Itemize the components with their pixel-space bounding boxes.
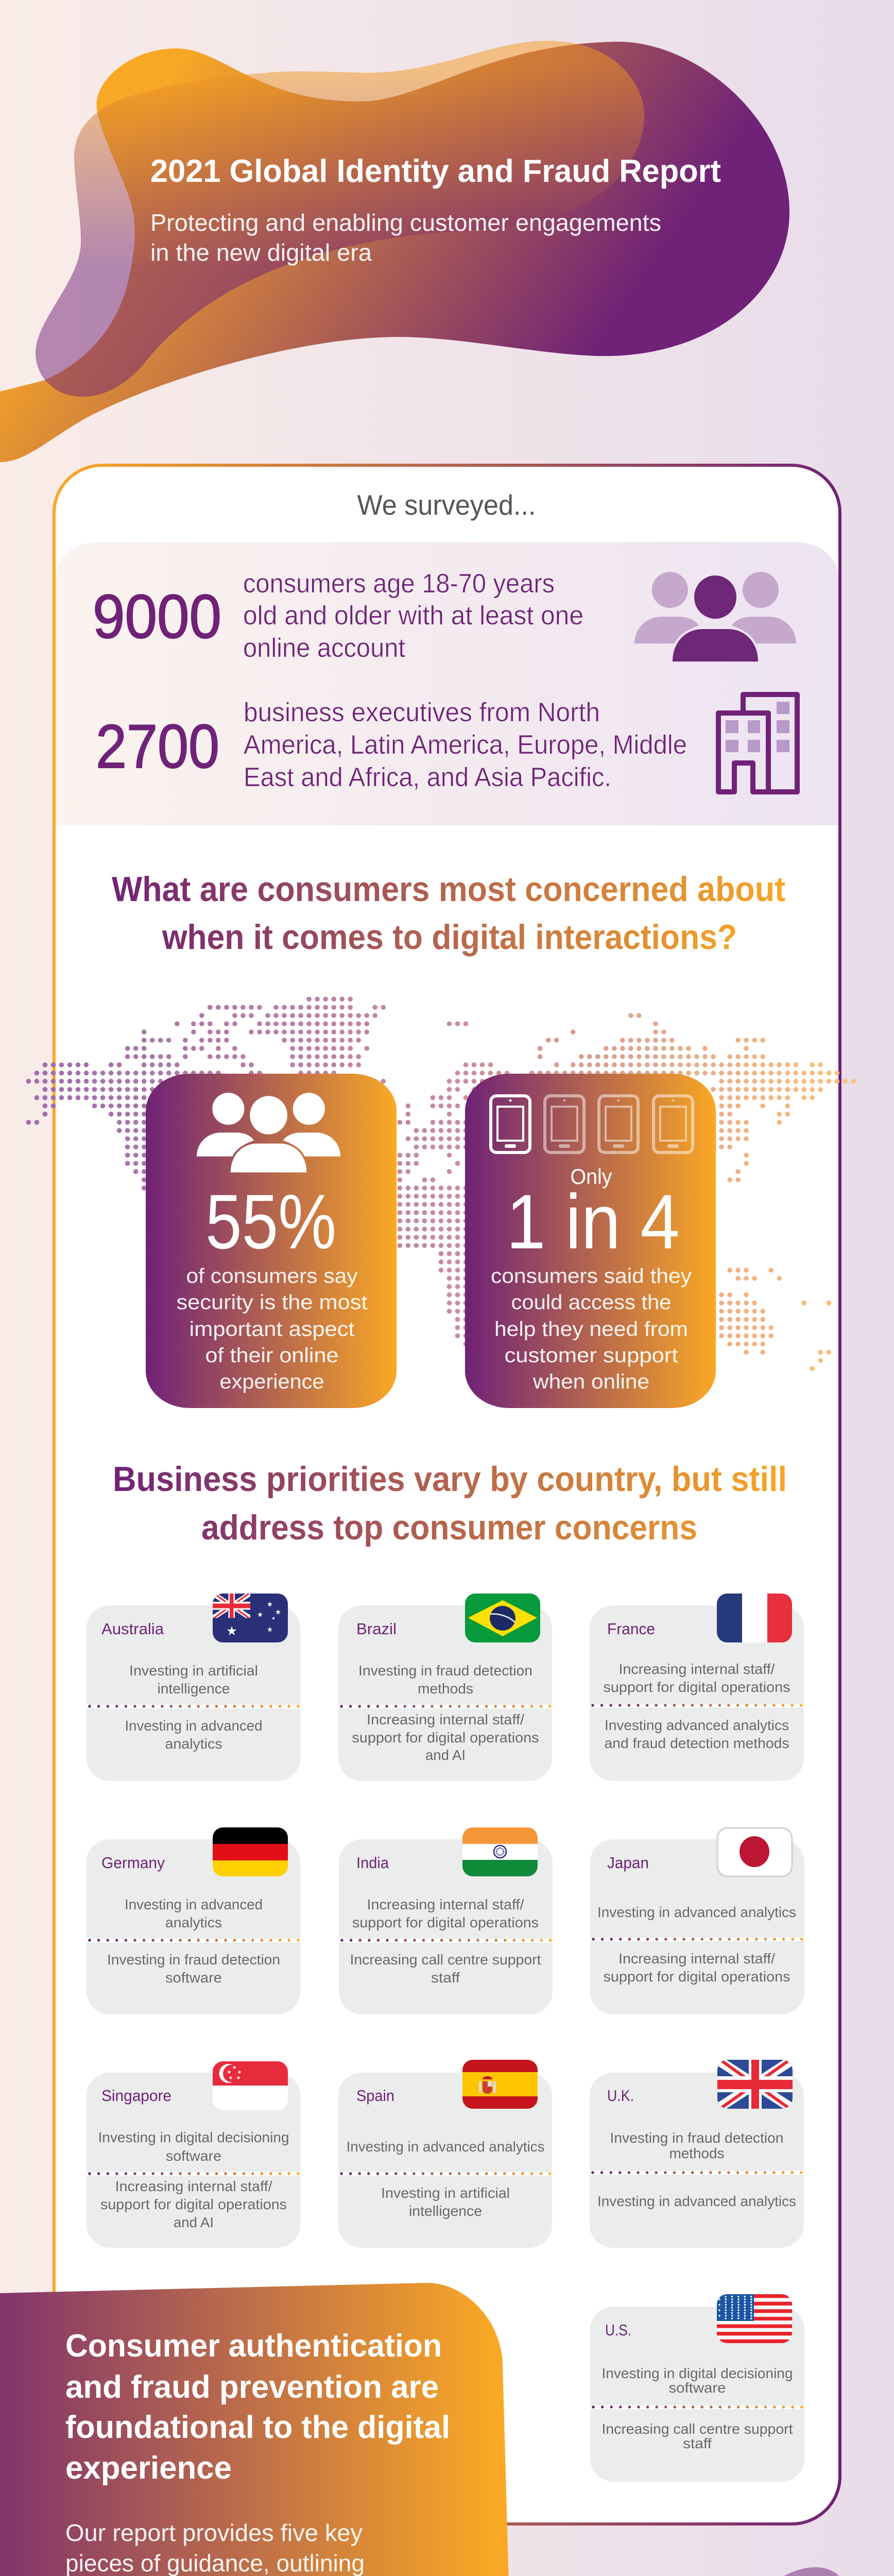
description: when online — [532, 1370, 649, 1393]
icon: office buildings — [718, 694, 797, 792]
heading: consumer concerns — [112, 870, 785, 957]
priorities: Investing in advanced analytics — [597, 1904, 796, 1920]
priorities — [125, 1663, 263, 1752]
priorities — [346, 2139, 545, 2219]
flag: Singapore — [213, 2061, 288, 2111]
stat: 2700 executives: 2700 — [96, 712, 219, 781]
stat: 9000 consumers: consumers age 18-70 years — [243, 569, 555, 599]
country name: Germany — [101, 1854, 165, 1872]
panel: survey band — [56, 542, 838, 825]
country name: Australia — [101, 1620, 164, 1638]
heading: authentication — [65, 2328, 450, 2486]
panel: India — [339, 1827, 553, 2014]
priorities: software — [166, 2148, 221, 2164]
stat: 2700 executives: East and Africa, and Asia Pacific. — [244, 762, 611, 792]
heading: authentication: and fraud prevention are — [65, 2369, 439, 2405]
priorities: Investing in advanced analytics — [346, 2139, 545, 2155]
flag: France — [717, 1594, 793, 1643]
flag: U.K. — [717, 2059, 793, 2109]
priorities: and AI — [425, 1747, 466, 1763]
panel: U.K. — [590, 2059, 804, 2248]
priorities: intelligence — [158, 1681, 230, 1697]
priorities: Increasing internal staff/ — [115, 2178, 272, 2194]
priorities: Investing in fraud detection — [610, 2130, 784, 2146]
stat: 2700 executives — [96, 698, 687, 792]
heading: business priorities — [113, 1460, 787, 1547]
priorities: software — [165, 1970, 222, 1986]
priorities: Investing in advanced — [125, 1896, 263, 1912]
flag: India — [462, 1827, 538, 1877]
hero subtitle: in the new digital era — [150, 239, 372, 266]
priorities: Investing in artificial — [129, 1663, 258, 1679]
country name: U.K. — [607, 2087, 634, 2105]
description: of their online — [205, 1344, 339, 1367]
hero subtitle: Protecting and enabling customer engagements — [150, 209, 661, 236]
panel: Germany — [87, 1827, 300, 2014]
heading: authentication: experience — [65, 2450, 232, 2486]
description: of consumers say — [186, 1265, 357, 1287]
stat: 9000 consumers: online account — [243, 633, 406, 663]
country name: France — [607, 1620, 655, 1638]
priorities: analytics — [165, 1914, 222, 1930]
priorities — [601, 2365, 793, 2451]
heading: business priorities: Business priorities vary by country, but still — [113, 1460, 787, 1499]
panel: Brazil — [338, 1594, 552, 1781]
priorities: Investing in advanced — [125, 1718, 263, 1734]
description: customer support — [505, 1344, 678, 1367]
priorities: Increasing call centre support — [601, 2421, 793, 2437]
body text — [65, 2519, 433, 2576]
priorities — [98, 2129, 289, 2230]
priorities: Increasing internal staff/ — [367, 1896, 524, 1912]
bottom blob graphic — [269, 2567, 868, 2576]
stat: 9000 consumers — [93, 569, 583, 663]
heading: consumer concerns: when it comes to digital interactions? — [162, 918, 737, 957]
priorities: analytics — [165, 1736, 222, 1752]
priorities: Investing in fraud detection — [358, 1663, 532, 1679]
stat: 9000 consumers: old and older with at least one — [243, 601, 583, 631]
description — [491, 1265, 692, 1393]
country name: Brazil — [356, 1620, 397, 1638]
priorities: staff — [683, 2435, 712, 2451]
priorities: Investing advanced analytics — [605, 1717, 789, 1733]
priorities — [597, 1904, 796, 1985]
icon: four phones — [491, 1096, 693, 1153]
panel: 1 in 4 consumers — [465, 1074, 716, 1408]
flag: U.S. — [717, 2294, 792, 2344]
flag: Germany — [213, 1827, 288, 1877]
priorities — [352, 1663, 539, 1763]
priorities: Increasing internal staff/ — [367, 1711, 524, 1727]
description: important aspect — [190, 1318, 354, 1341]
panel: call to action gradient — [0, 2283, 509, 2576]
priorities: Increasing internal staff/ — [618, 1951, 775, 1967]
hero blob graphic — [0, 41, 789, 462]
flag: Australia — [213, 1593, 288, 1643]
panel: Australia — [87, 1593, 300, 1781]
priorities: Investing in fraud detection — [107, 1952, 280, 1968]
priorities: Investing in digital decisioning — [98, 2129, 289, 2145]
icon: people — [634, 572, 796, 662]
priorities: support for digital operations — [604, 1679, 790, 1695]
priorities: staff — [431, 1970, 460, 1986]
main white card outline — [54, 465, 840, 2524]
panel: U.S. — [590, 2294, 804, 2482]
stat: 55%: 55% — [205, 1178, 336, 1265]
dotted world map — [28, 999, 854, 1369]
country name: India — [356, 1854, 389, 1872]
priorities: Increasing call centre support — [350, 1952, 541, 1968]
panel: France — [590, 1594, 804, 1781]
hero title: 2021 Global Identity and Fraud Report — [150, 154, 721, 189]
stat: 2700 executives: business executives from North — [244, 698, 600, 727]
description: security is the most — [176, 1291, 368, 1314]
priorities: support for digital operations — [100, 2196, 287, 2212]
priorities — [107, 1896, 280, 1986]
priorities: support for digital operations — [352, 1914, 539, 1930]
description: help they need from — [494, 1318, 688, 1341]
panel: Japan — [590, 1828, 804, 2014]
priorities: support for digital operations — [604, 1969, 790, 1985]
priorities: methods — [669, 2145, 724, 2161]
priorities: Investing in digital decisioning — [601, 2365, 793, 2381]
priorities: Investing in artificial — [381, 2185, 510, 2201]
icon: people white — [197, 1093, 340, 1173]
hero subtitle — [150, 209, 661, 266]
heading: we surveyed: We surveyed... — [357, 489, 536, 521]
country name: U.S. — [605, 2321, 631, 2339]
panel: Spain — [338, 2060, 552, 2248]
country name: Japan — [607, 1854, 649, 1872]
heading: business priorities: address top consumer concerns — [201, 1508, 697, 1547]
description: experience — [219, 1370, 324, 1393]
heading: consumer concerns: What are consumers most concerned about — [112, 870, 785, 909]
country name: Singapore — [101, 2087, 171, 2105]
priorities — [604, 1661, 790, 1751]
body text: pieces of guidance, outlining — [65, 2550, 365, 2576]
priorities: Increasing internal staff/ — [619, 1661, 775, 1677]
flag: Spain — [462, 2060, 538, 2109]
priorities: support for digital operations — [352, 1730, 539, 1745]
stat: 1 in 4: 1 in 4 — [506, 1178, 680, 1265]
priorities: software — [668, 2380, 726, 2396]
stat: 2700 executives: America, Latin America, Europe, Middle — [244, 730, 687, 760]
priorities: and AI — [174, 2214, 214, 2230]
description — [176, 1265, 368, 1393]
panel: Singapore — [87, 2061, 300, 2248]
priorities — [350, 1896, 541, 1986]
description: consumers said they — [491, 1265, 692, 1287]
description: could access the — [511, 1291, 672, 1314]
flag: Brazil — [465, 1594, 540, 1643]
priorities: and fraud detection methods — [605, 1735, 789, 1751]
priorities — [597, 2130, 796, 2209]
heading: authentication: Consumer authentication — [65, 2328, 442, 2364]
label: only: Only — [571, 1164, 612, 1189]
flag: Japan — [717, 1828, 792, 1876]
heading: authentication: foundational to the digital — [65, 2410, 450, 2445]
stat: 9000 consumers: 9000 — [93, 582, 221, 651]
priorities: Investing in advanced analytics — [597, 2193, 796, 2209]
country name: Spain — [356, 2087, 394, 2105]
panel: 55% of consumers — [146, 1074, 397, 1408]
priorities: methods — [418, 1681, 473, 1697]
body text: Our report provides five key — [65, 2519, 363, 2546]
priorities: intelligence — [409, 2203, 482, 2219]
